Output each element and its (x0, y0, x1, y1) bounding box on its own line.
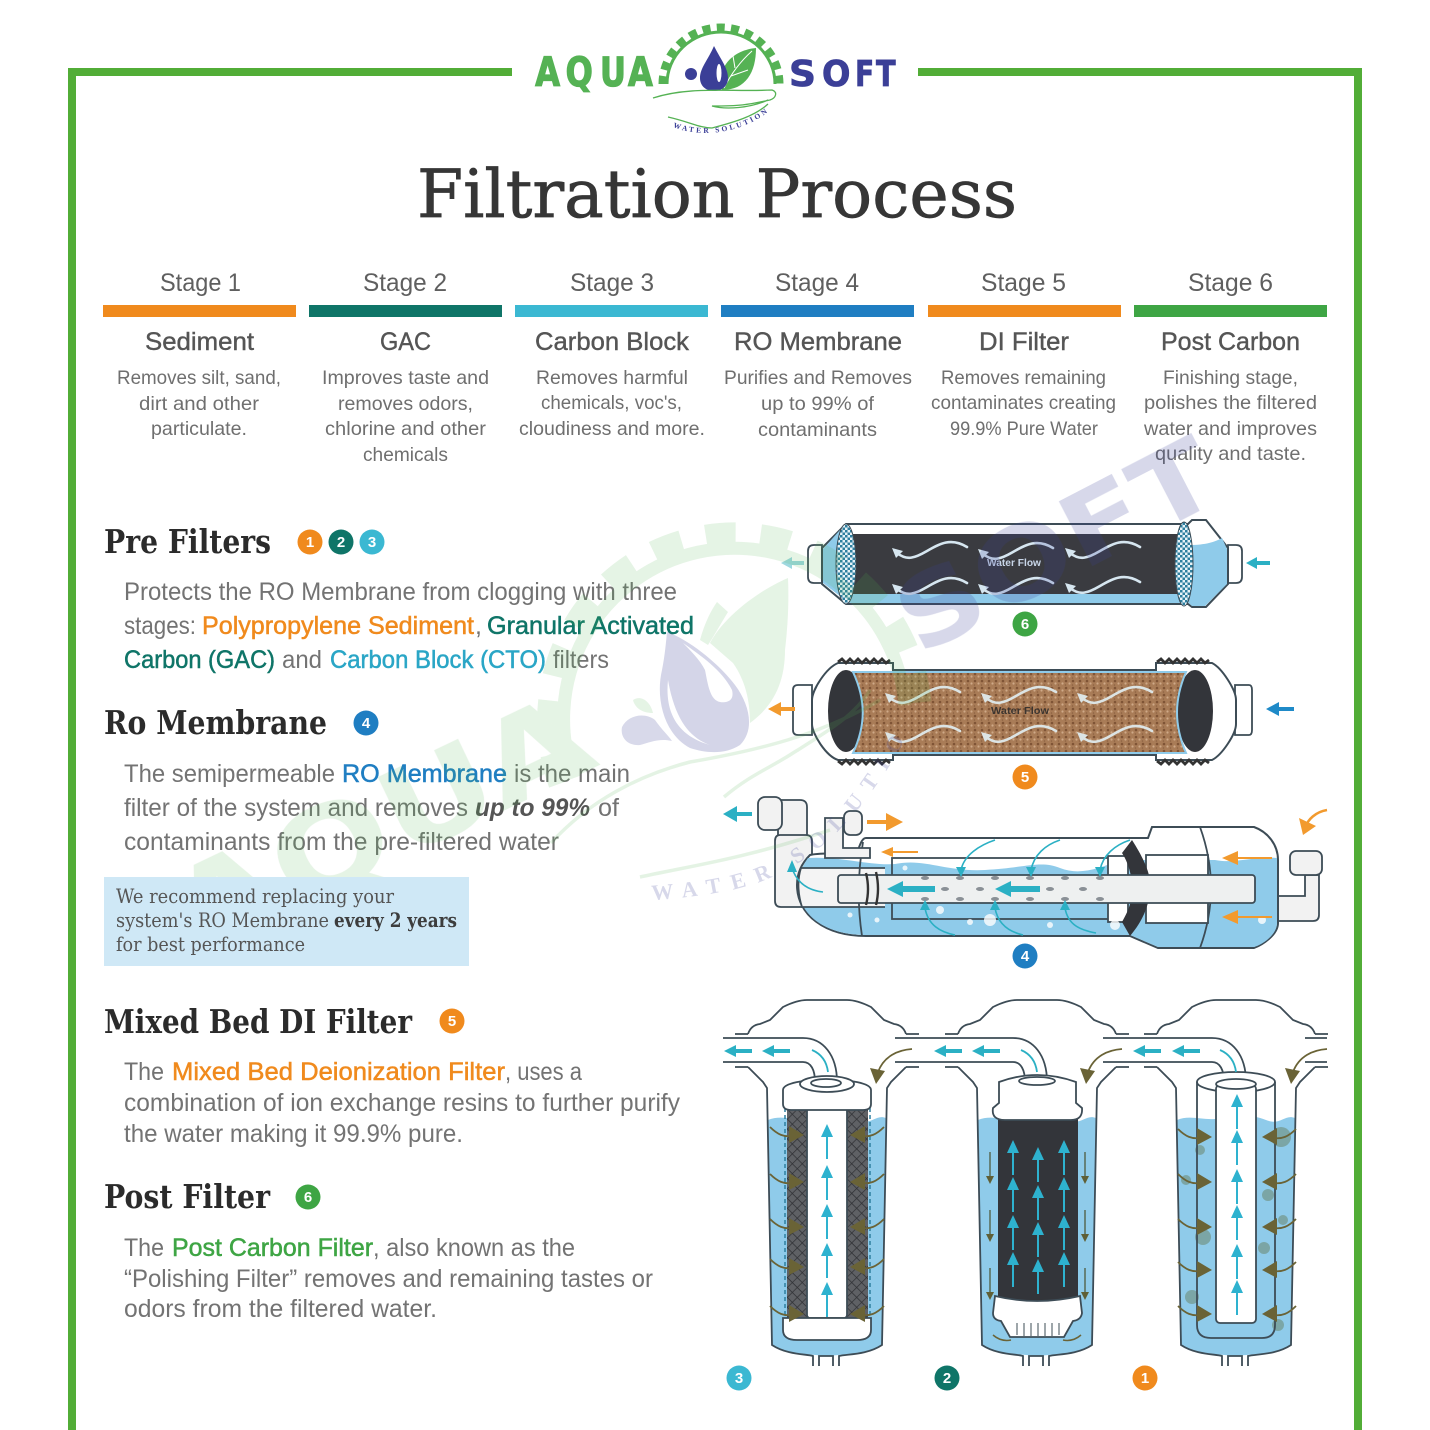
badge 5 (440, 1008, 464, 1034)
logo leaf (721, 48, 756, 90)
callout: replacement: every 2 years (334, 908, 457, 932)
badge 4 (354, 710, 378, 736)
membrane teal flow arrows (792, 840, 1130, 935)
stage 2: removes odors, (338, 393, 473, 415)
filter 5 housing (812, 663, 1236, 760)
stage 3: chemicals, voc's, (541, 392, 682, 414)
diagram: di filter 5 (768, 659, 1294, 790)
watermark word SOFT: SOFT (876, 415, 1236, 677)
mixed bed text: the water making it 99.9% pure. (124, 1120, 463, 1148)
stage 1: Sediment (145, 328, 254, 356)
stage 5: DI Filter (979, 328, 1069, 356)
stage 6: quality and taste. (1155, 443, 1306, 465)
membrane end cavity (798, 868, 885, 907)
badge 1 (1132, 1366, 1158, 1390)
diagram: ro membrane 4 (723, 797, 1327, 968)
stage 5: Stage 5 (981, 269, 1066, 297)
watermark word AQUA: AQUA (149, 668, 613, 983)
membrane housing body (797, 827, 1278, 948)
heading: mixed bed: Mixed Bed DI Filter (104, 1002, 413, 1041)
pre filters text: and (282, 646, 322, 674)
stage 1 (103, 269, 296, 440)
pre filters text: , (475, 612, 482, 640)
membrane center tube (838, 875, 1255, 903)
pre filters text: Carbon (GAC) (124, 646, 275, 674)
pre filters text: Granular Activated (487, 612, 694, 640)
post filter text: , also known as the (373, 1234, 575, 1262)
filter 5 threads (838, 659, 1209, 764)
stage 4: contaminants (758, 419, 877, 441)
membrane white collars (1108, 855, 1208, 923)
post filter text: Post Carbon Filter (172, 1234, 373, 1262)
membrane gasket (1122, 840, 1150, 936)
membrane middle elbow (825, 811, 870, 858)
badge 1: 1 (1141, 1370, 1149, 1387)
badges 1 2 3: 2 (337, 534, 345, 551)
logo: Aqua Soft (534, 24, 896, 133)
watermark gear (548, 533, 921, 784)
pre filters text: Protects the RO Membrane from clogging with three (124, 578, 677, 606)
ro membrane text: is the main (514, 760, 630, 788)
stage 3: Carbon Block (535, 328, 690, 356)
callout: replacement (104, 877, 469, 966)
badge 6: 6 (304, 1189, 312, 1206)
badge 6: 6 (1021, 616, 1029, 633)
watermark leaf (710, 578, 788, 723)
cartridge housing 1 (1103, 1000, 1328, 1366)
badge 6 (296, 1184, 320, 1210)
ro membrane text: contaminants from the pre-filtered water (124, 828, 559, 856)
stage 3: Removes harmful (536, 367, 688, 389)
watermark hand (551, 690, 880, 877)
membrane out arrow (723, 806, 752, 822)
stage 2: chlorine and other (325, 418, 487, 440)
membrane input arrows (1222, 851, 1272, 924)
logo hand (653, 90, 776, 128)
pipe bend teal arrows (812, 1050, 1236, 1072)
stage 6: Finishing stage, (1163, 367, 1298, 389)
stage 6 (1134, 269, 1327, 465)
membrane teal arrowheads (787, 860, 1105, 910)
filter 6 meshes (836, 522, 1193, 606)
stage 2 (309, 269, 502, 466)
stage 6: water and improves (1143, 418, 1317, 440)
stage 5: Removes remaining (941, 367, 1106, 389)
watermark drop (660, 632, 749, 752)
pre filters text: Polypropylene Sediment (202, 612, 474, 640)
pre filters text: stages: (124, 612, 196, 640)
filter 6 nozzles (808, 545, 1242, 583)
stage 2: Improves taste and (322, 367, 489, 389)
stage 5: 99.9% Pure Water (950, 418, 1098, 440)
pre filters text: Carbon Block (CTO) (330, 646, 546, 674)
callout: replacement: system's RO Membrane (116, 908, 329, 932)
filter 5 resin bed (853, 672, 1186, 753)
cartridge housing 3 (723, 1000, 919, 1366)
stage 2: chemicals (363, 444, 448, 466)
panel: pre filters (104, 522, 694, 674)
badges 1 2 3 (298, 530, 384, 554)
logo word SOFT: F (855, 53, 874, 95)
watermark drop highlight (683, 643, 733, 702)
logo word SOFT: S (789, 53, 816, 95)
mixed bed text (124, 1058, 680, 1148)
post filter text (124, 1234, 653, 1323)
inlet brown arrows (870, 1049, 1327, 1084)
stage 4 (721, 269, 914, 441)
filter 6 housing (822, 520, 1228, 607)
filter 6 flow arrows (892, 542, 1140, 594)
post filter text: The (124, 1234, 164, 1262)
membrane left elbow pipes (758, 797, 812, 907)
filter 5 end discs (828, 670, 1213, 752)
stage 2: GAC (380, 328, 431, 356)
badge 6 (1012, 612, 1038, 636)
membrane right elbow pipe (1278, 851, 1322, 921)
panel: mixed bed di filter (104, 1002, 680, 1148)
panel: post filter (104, 1177, 653, 1323)
logo water drop (685, 46, 728, 91)
logo gear (663, 28, 779, 84)
stage 3: cloudiness and more. (519, 418, 705, 440)
logo word AQUA: AQUA (535, 48, 653, 96)
membrane element outline (892, 858, 1112, 919)
stage 1: dirt and other (139, 393, 260, 415)
mixed bed text: Mixed Bed Deionization Filter (172, 1058, 505, 1086)
heading: pre filters: Pre Filters (104, 522, 271, 561)
badge 5 (1012, 764, 1038, 790)
watermark small splash (633, 698, 653, 713)
badges 1 2 3: 1 (306, 534, 314, 551)
stage 4: Stage 4 (775, 269, 859, 297)
stage 4: RO Membrane (734, 328, 902, 356)
badge 4 (1012, 944, 1038, 968)
stage 6: Post Carbon (1161, 328, 1300, 356)
panel: stage columns (103, 269, 1327, 466)
mixed bed text: combination of ion exchange resins to further purify (124, 1089, 680, 1117)
cartridge housing 2 (895, 1000, 1129, 1366)
callout: replacement: for best performance (116, 932, 305, 956)
ro membrane text (124, 760, 630, 856)
ro membrane text: The semipermeable (124, 760, 335, 788)
post filter text: odors from the filtered water. (124, 1295, 437, 1323)
filter 5 out arrow (768, 702, 795, 716)
membrane water (798, 858, 1277, 947)
ro membrane text: RO Membrane (342, 760, 507, 788)
pre filters text (124, 578, 694, 674)
filter 6 out arrow (781, 557, 804, 569)
watermark logo (149, 415, 1236, 983)
filter 5 in arrow (1266, 702, 1294, 716)
heading: post filter: Post Filter (104, 1177, 271, 1216)
stage 6: Stage 6 (1188, 269, 1273, 297)
filter 5 flow arrows (885, 687, 1152, 742)
stage 5 (928, 269, 1121, 440)
stage 1: particulate. (151, 418, 247, 440)
badge 5: 5 (448, 1013, 456, 1030)
stage 5: contaminates creating (931, 392, 1116, 414)
badge 3: 3 (735, 1370, 743, 1387)
badge 5: 5 (1021, 769, 1029, 786)
ro membrane text: filter of the system and removes (124, 794, 468, 822)
membrane curved input arrow (1299, 810, 1327, 835)
badges 1 2 3: 3 (368, 534, 376, 551)
stage 4: up to 99% of (761, 393, 875, 415)
filter 5 label: Water Flow (991, 705, 1050, 717)
filter 6 water (823, 530, 1227, 606)
watermark splash (622, 716, 672, 745)
pipe teal flow arrows (724, 1045, 1200, 1057)
stage 2: Stage 2 (363, 269, 447, 297)
membrane waste arrow (867, 813, 903, 831)
membrane tube perforations (921, 876, 1104, 901)
logo word SOFT: T (876, 53, 896, 95)
ro membrane text: of (598, 794, 619, 822)
membrane housing seams (859, 827, 1211, 948)
ro membrane text: up to 99% (475, 794, 590, 822)
membrane waste inner arrow (881, 847, 918, 857)
title: Filtration Process (417, 156, 1017, 233)
mixed bed text: , uses a (505, 1058, 582, 1086)
callout: replacement: We recommend replacing your (116, 884, 394, 908)
badge 2 (934, 1366, 960, 1390)
panel: ro membrane (104, 703, 630, 856)
heading: ro membrane: Ro Membrane (104, 703, 327, 742)
pre filters text: filters (553, 646, 609, 674)
stage 1: Removes silt, sand, (117, 367, 281, 389)
badge 4: 4 (1021, 948, 1030, 965)
stage 3 (515, 269, 708, 440)
stage 6: polishes the filtered (1144, 392, 1317, 414)
stage 3: Stage 3 (570, 269, 654, 297)
stage 4: Purifies and Removes (724, 367, 912, 389)
diagram: cartridges 3 2 1 (723, 1000, 1328, 1390)
watermark drop crescent (667, 680, 710, 745)
watermark green artwork (149, 533, 921, 983)
stage 1: Stage 1 (160, 269, 241, 297)
filter 6 label: Water Flow (987, 557, 1042, 569)
membrane bubbles (848, 866, 1266, 930)
filter 5 nozzles (793, 685, 1252, 735)
mixed bed text: The (124, 1058, 164, 1086)
badge 2: 2 (943, 1370, 951, 1387)
membrane tube rings (866, 872, 878, 905)
badge 4: 4 (362, 715, 371, 732)
post filter text: “Polishing Filter” removes and remaining tastes or (124, 1265, 653, 1293)
logo word SOFT: O (822, 54, 850, 95)
filter 6 in arrow (1246, 557, 1270, 569)
logo word SOFT (789, 53, 896, 95)
watermark small leaf (700, 602, 728, 645)
badge 3 (726, 1366, 752, 1390)
logo tagline: WATER SOLUTION (674, 108, 767, 133)
diagram: post carbon filter 6 (781, 520, 1270, 636)
filter 6 carbon core (852, 534, 1180, 594)
